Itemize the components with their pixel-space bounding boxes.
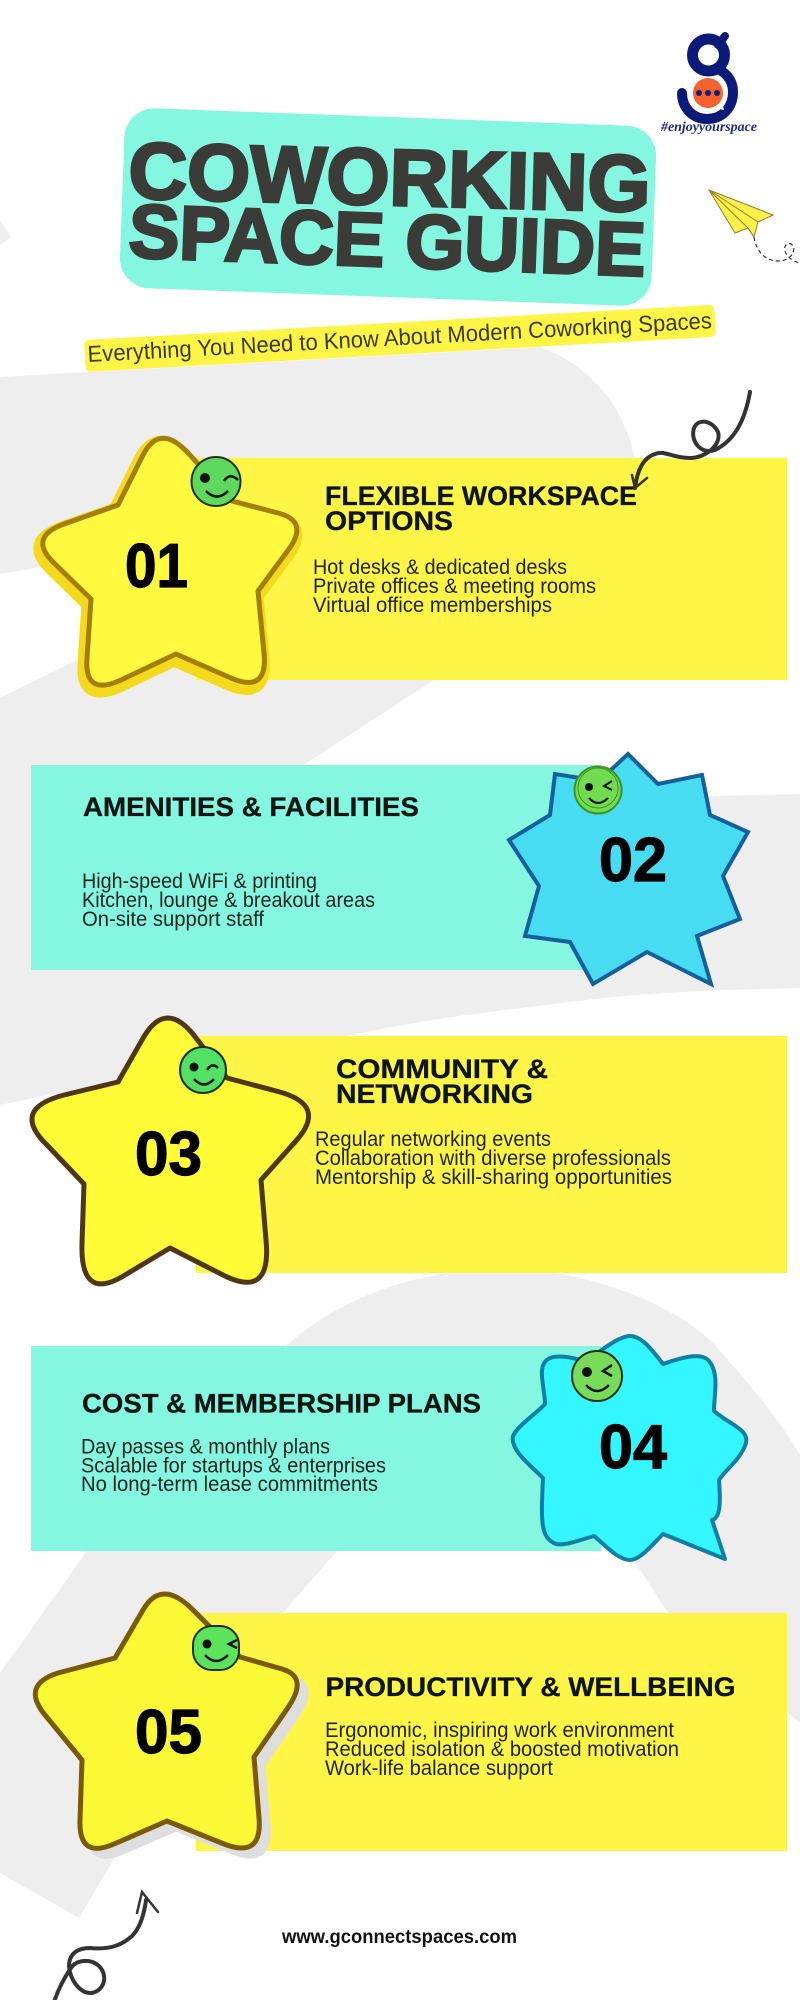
body text: Regular networking events [315, 1127, 551, 1151]
heading: OPTIONS [325, 506, 453, 536]
panel: 04 cost and membership plans [31, 1336, 746, 1560]
body text: Mentorship & skill-sharing opportunities [315, 1165, 672, 1189]
speech bubble badge 04: 04 [599, 1413, 668, 1482]
star badge 03 [32, 1018, 309, 1284]
panel background [196, 1613, 787, 1851]
icon: winking smiley [574, 766, 622, 814]
body text [82, 869, 375, 931]
panel: 05 productivity and wellbeing [35, 1594, 787, 1856]
body text [313, 555, 596, 617]
body text: High-speed WiFi & printing [82, 869, 317, 893]
body text [325, 1718, 679, 1780]
star badge 05 [35, 1594, 306, 1856]
burst badge 02 [509, 754, 748, 984]
logo: g connect spaces [660, 36, 757, 135]
body text [315, 1127, 672, 1189]
website footer: www.gconnectspaces.com [281, 1927, 517, 1948]
heading: COST & MEMBERSHIP PLANS [82, 1388, 481, 1418]
icon: winking smiley [180, 1047, 226, 1093]
icon: winking smiley [192, 457, 240, 506]
heading: PRODUCTIVITY & WELLBEING [326, 1672, 736, 1702]
body text: Day passes & monthly plans [81, 1434, 330, 1458]
panel background [196, 1036, 787, 1273]
body text: Collaboration with diverse professionals [315, 1146, 671, 1170]
body text: Private offices & meeting rooms [313, 574, 596, 598]
body text: Reduced isolation & boosted motivation [325, 1737, 679, 1761]
burst badge 02: 02 [599, 826, 667, 895]
panel background [31, 1346, 601, 1551]
title card [119, 107, 657, 307]
body text: On-site support staff [82, 907, 264, 931]
panel background [31, 765, 601, 970]
body text: Scalable for startups & enterprises [81, 1454, 386, 1478]
panel: 03 community and networking [32, 1018, 787, 1284]
logo: g connect spaces: #enjoyyourspace [660, 120, 757, 135]
body text: Hot desks & dedicated desks [313, 555, 567, 579]
star badge 01 [41, 438, 297, 690]
speech bubble badge 04 [513, 1336, 746, 1560]
panel: 02 amenities and facilities [31, 754, 748, 984]
body text: Virtual office memberships [313, 593, 552, 617]
star badge 01: 01 [125, 532, 188, 601]
heading [336, 1054, 548, 1109]
body text [81, 1434, 386, 1496]
arrow: curly arrow to first panel [632, 392, 750, 488]
heading: AMENITIES & FACILITIES [83, 792, 419, 822]
icon: paper airplane with dashed trail [709, 190, 800, 263]
body text: No long-term lease commitments [81, 1472, 378, 1496]
heading: FLEXIBLE WORKSPACE [325, 481, 637, 511]
icon: winking smiley [572, 1351, 622, 1401]
icon: winking smiley [193, 1626, 239, 1670]
title line 1: COWORKING [128, 126, 652, 229]
star badge 05: 05 [135, 1698, 202, 1767]
title line 2: SPACE GUIDE [127, 189, 647, 293]
subtitle banner: Everything You Need to Know About Modern Coworking Spaces [87, 307, 712, 367]
panel background [196, 458, 787, 680]
heading: COMMUNITY & [336, 1054, 548, 1084]
panel: 01 flexible workspace options [41, 438, 787, 690]
arrow: curly arrow bottom left [54, 1892, 158, 2000]
body text: Ergonomic, inspiring work environment [325, 1718, 674, 1742]
heading: NETWORKING [336, 1079, 533, 1109]
body text: Work-life balance support [325, 1756, 553, 1780]
star badge 03: 03 [135, 1120, 202, 1189]
body text: Kitchen, lounge & breakout areas [82, 888, 375, 912]
heading [325, 481, 637, 536]
